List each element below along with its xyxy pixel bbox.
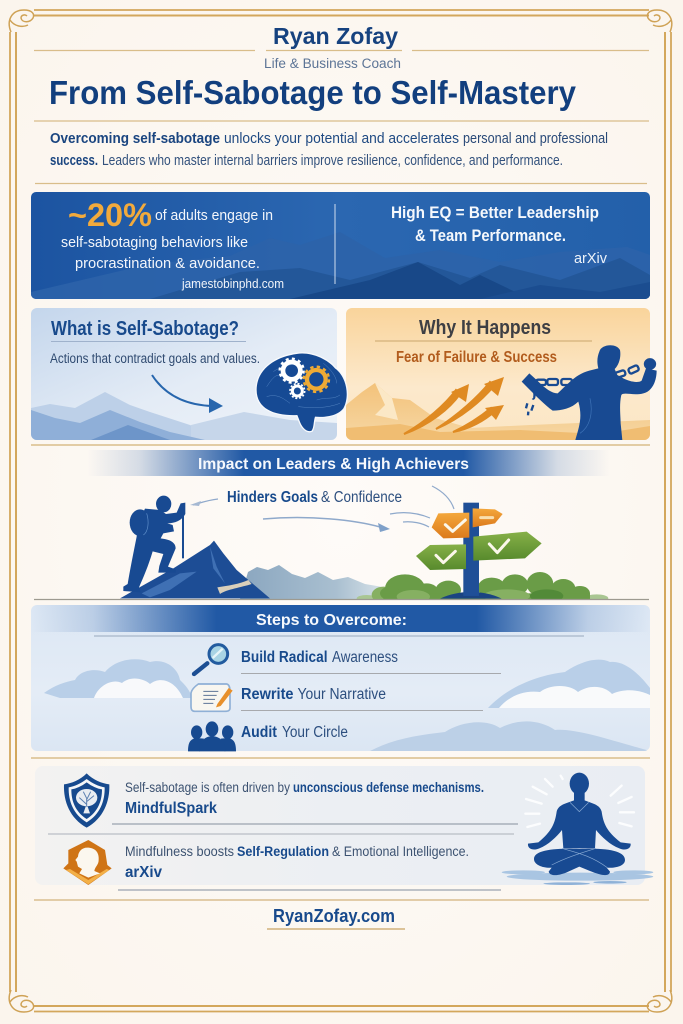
stat description: procrastination & avoidance.	[75, 255, 260, 272]
step 1: Awareness	[332, 649, 398, 666]
step 3: Your Circle	[282, 724, 348, 741]
stat description: self-sabotaging behaviors like	[61, 234, 248, 251]
insight 2: arXiv	[125, 864, 162, 881]
text: hinders goals: Hinders Goals	[227, 489, 318, 506]
icon: three people	[188, 721, 236, 751]
brand name: Ryan Zofay	[273, 23, 398, 49]
rule under cards	[31, 444, 650, 446]
rock	[120, 541, 270, 598]
EQ statement: High EQ = Better Leadership	[391, 203, 599, 222]
icon: meditating figure	[502, 773, 653, 885]
icon: hiker on mountain	[120, 496, 270, 598]
distant mountains	[240, 565, 400, 599]
intro paragraph	[50, 131, 608, 169]
insight 1	[125, 780, 484, 817]
EQ statement	[391, 203, 599, 245]
section banner: impact	[87, 450, 610, 476]
EQ statement: & Team Performance.	[415, 226, 566, 245]
icon: shield with tree	[64, 773, 109, 828]
insight 2: Self-Regulation	[237, 844, 329, 859]
stat description: of adults engage in	[155, 207, 273, 224]
rising arrows	[404, 377, 504, 434]
man breaking chains	[522, 345, 657, 440]
main title: From Self-Sabotage to Self-Mastery	[49, 75, 576, 112]
insight 1: Self-sabotage is often driven by	[125, 780, 290, 795]
motion arrows	[190, 486, 454, 532]
step 2	[241, 686, 386, 703]
step 3: Audit	[241, 724, 277, 741]
step 1: Build Radical	[241, 649, 328, 666]
icon: signpost with trees	[357, 503, 608, 603]
panel: what is self-sabotage	[31, 308, 337, 440]
insight 2: Mindfulness boosts	[125, 844, 234, 859]
text: hinders goals: & Confidence	[321, 489, 402, 506]
icon: document and pencil	[191, 684, 233, 711]
icon: brain with gears	[257, 354, 347, 431]
step 3	[241, 724, 348, 741]
rule below impact	[34, 598, 649, 600]
insight 1: unconscious defense mechanisms.	[293, 780, 484, 795]
text: hinders goals	[227, 489, 402, 506]
fear of failure text: Fear of Failure & Success	[396, 349, 557, 366]
hiker	[123, 496, 185, 592]
EQ source: arXiv	[574, 251, 608, 267]
panel: statistics banner	[31, 192, 650, 299]
intro paragraph: personal and professional	[463, 131, 608, 147]
panel: why it happens	[346, 308, 657, 440]
footer website: RyanZofay.com	[273, 906, 395, 926]
intro paragraph: unlocks your potential and accelerates	[224, 131, 459, 147]
orange mountain	[346, 383, 650, 440]
heading: What is Self-Sabotage?	[51, 318, 239, 340]
section banner: impact: Impact on Leaders & High Achievers	[198, 456, 469, 473]
panel: steps to overcome	[31, 605, 650, 751]
trees	[356, 572, 608, 599]
intro paragraph: Leaders who master internal barriers improve resilience, confidence, and performance.	[102, 153, 563, 169]
arrow	[152, 375, 223, 413]
intro paragraph: success.	[50, 153, 98, 169]
panel: insights	[35, 766, 653, 890]
subtitle: Life & Business Coach	[264, 56, 401, 71]
insight 1: MindfulSpark	[125, 800, 217, 817]
header rules	[34, 50, 649, 184]
icon: orange head badge	[63, 840, 112, 885]
stat: 20 percent: ~20%	[68, 197, 152, 233]
rule below steps	[31, 757, 650, 759]
stat source: jamestobinphd.com	[181, 277, 284, 291]
insight 2	[125, 844, 469, 881]
heading: Why It Happens	[419, 317, 551, 339]
description: Actions that contradict goals and values.	[50, 351, 260, 366]
step 1	[241, 649, 398, 666]
clouds	[44, 659, 192, 698]
icon: magnifier	[194, 645, 228, 674]
insight 2: & Emotional Intelligence.	[332, 844, 469, 859]
rule above footer	[34, 899, 649, 901]
step 2: Rewrite	[241, 686, 294, 703]
step 2: Your Narrative	[298, 686, 386, 703]
heading: Steps to Overcome:	[256, 612, 407, 629]
intro paragraph: Overcoming self-sabotage	[50, 131, 220, 147]
stat description	[61, 207, 273, 272]
